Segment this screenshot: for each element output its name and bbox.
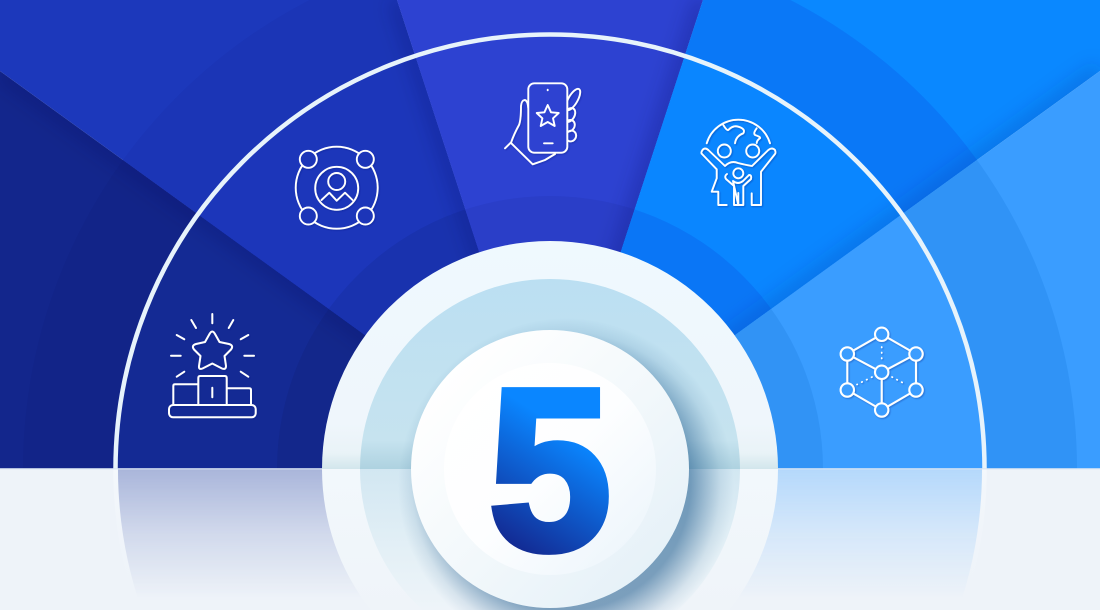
floor reflection of the arc [116, 469, 984, 610]
icon: podium with star [169, 314, 256, 417]
wedge 1: dark navy [0, 71, 366, 469]
inner disc drop shadow [398, 318, 734, 610]
icon: network cube [841, 328, 923, 417]
semicircle arc outline [116, 34, 984, 469]
outer white disc [322, 241, 778, 610]
floor panel with reflection [0, 468, 1100, 579]
light blue ring [360, 279, 740, 610]
floor reflection of the wedges [118, 469, 982, 579]
icon: hand holding phone with star [505, 83, 583, 164]
inner white disc [411, 330, 689, 608]
sector background: five wedges [0, 0, 1100, 469]
icon: family holding up globe [701, 120, 776, 205]
icon: person in network circle [296, 147, 378, 229]
number 5: 5 [489, 342, 611, 598]
wedge 5: sky blue [734, 71, 1100, 469]
wedge 4: bright blue [620, 0, 1100, 336]
central medallion [322, 241, 778, 610]
inner core disc [444, 363, 656, 575]
wedge 2: royal blue [0, 0, 480, 336]
wedge 3: indigo [397, 0, 703, 252]
